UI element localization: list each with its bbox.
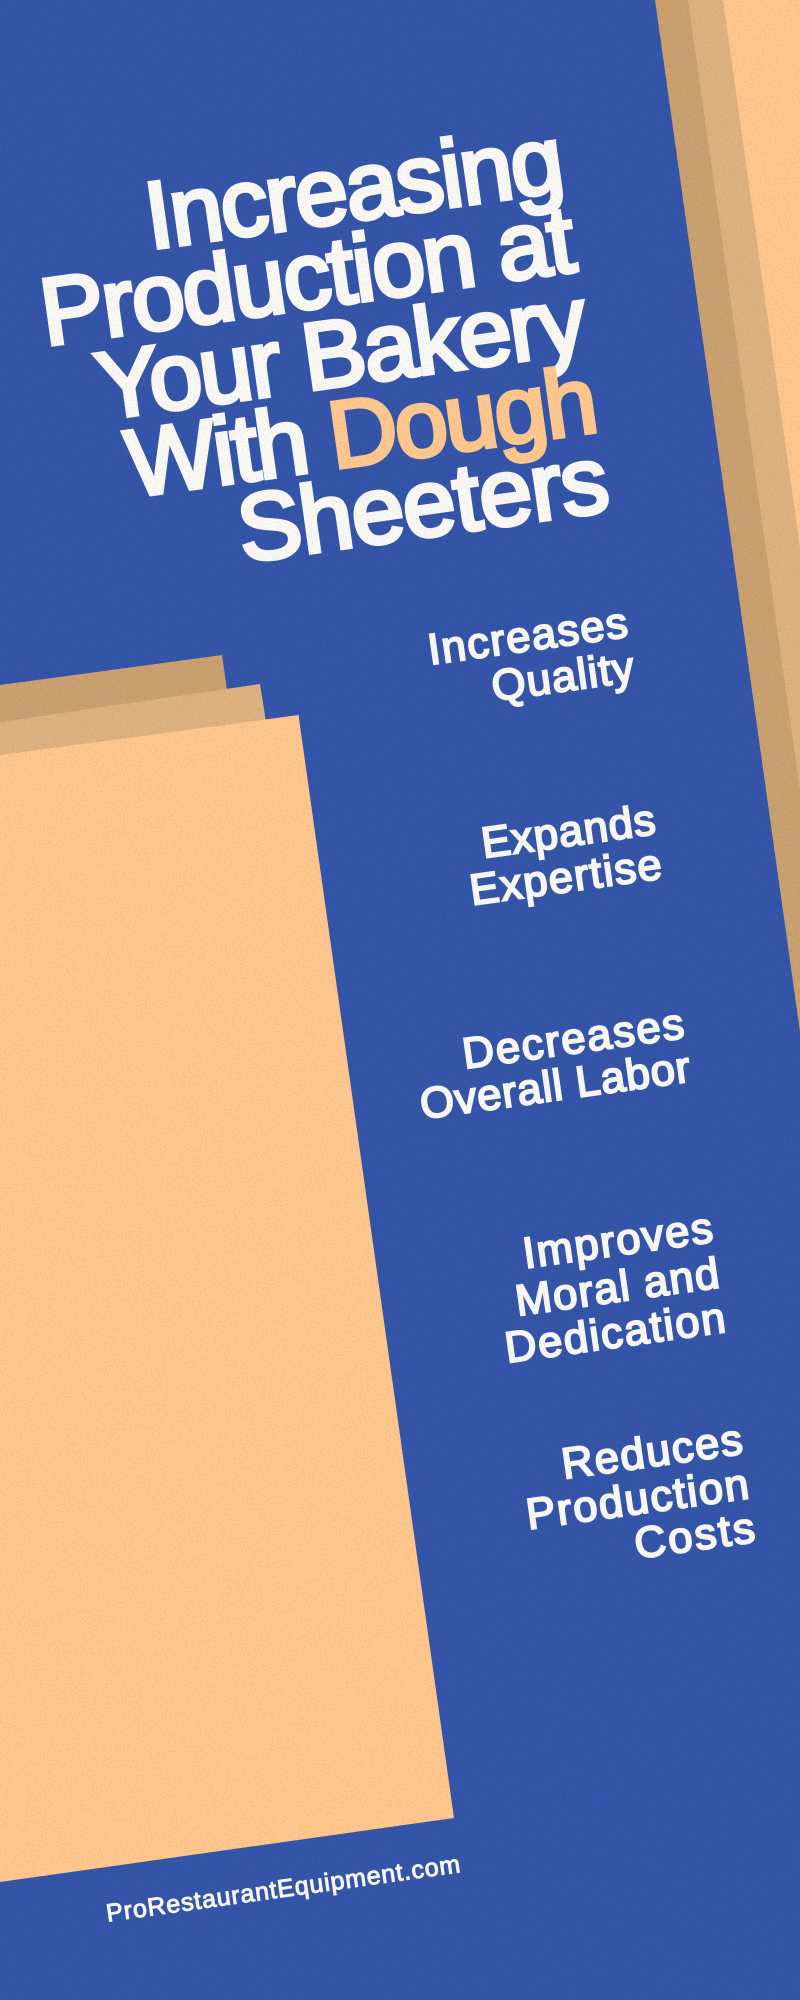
title: Production at bbox=[34, 186, 581, 366]
title: Your Bakery bbox=[90, 267, 593, 440]
footer url: ProRestaurantEquipment.com bbox=[104, 1850, 462, 1928]
list item: improves moral and dedication bbox=[489, 1204, 728, 1373]
list item: improves moral and dedication: Moral and bbox=[512, 1250, 722, 1326]
title bbox=[22, 106, 615, 606]
list item: increases quality: Quality bbox=[489, 644, 637, 711]
list item: decreases overall labor: Overall Labor bbox=[417, 1044, 693, 1129]
list item: expands expertise: Expertise bbox=[467, 841, 665, 915]
list item: reduces production costs: Reduces bbox=[559, 1416, 745, 1489]
list item: improves moral and dedication: Dedication bbox=[502, 1294, 728, 1373]
title: With Dough bbox=[120, 347, 604, 518]
list item: decreases overall labor: Decreases bbox=[459, 1000, 687, 1079]
list item: improves moral and dedication: Improves bbox=[520, 1204, 716, 1278]
title: Sheeters bbox=[231, 426, 615, 583]
list item: increases quality bbox=[425, 599, 637, 719]
list item: reduces production costs: Production bbox=[523, 1461, 752, 1539]
panel: right dough sheet stack bbox=[655, 0, 800, 1032]
list item: expands expertise: Expands bbox=[478, 796, 658, 868]
list item: reduces production costs: Costs bbox=[631, 1504, 758, 1568]
list item: expands expertise bbox=[461, 796, 665, 915]
list item: increases quality: Increases bbox=[425, 599, 631, 675]
title: Increasing bbox=[138, 106, 570, 270]
panel: left dough sheet stack bbox=[0, 655, 454, 1882]
list item: decreases overall labor bbox=[411, 1000, 693, 1129]
list item: reduces production costs bbox=[517, 1416, 758, 1583]
